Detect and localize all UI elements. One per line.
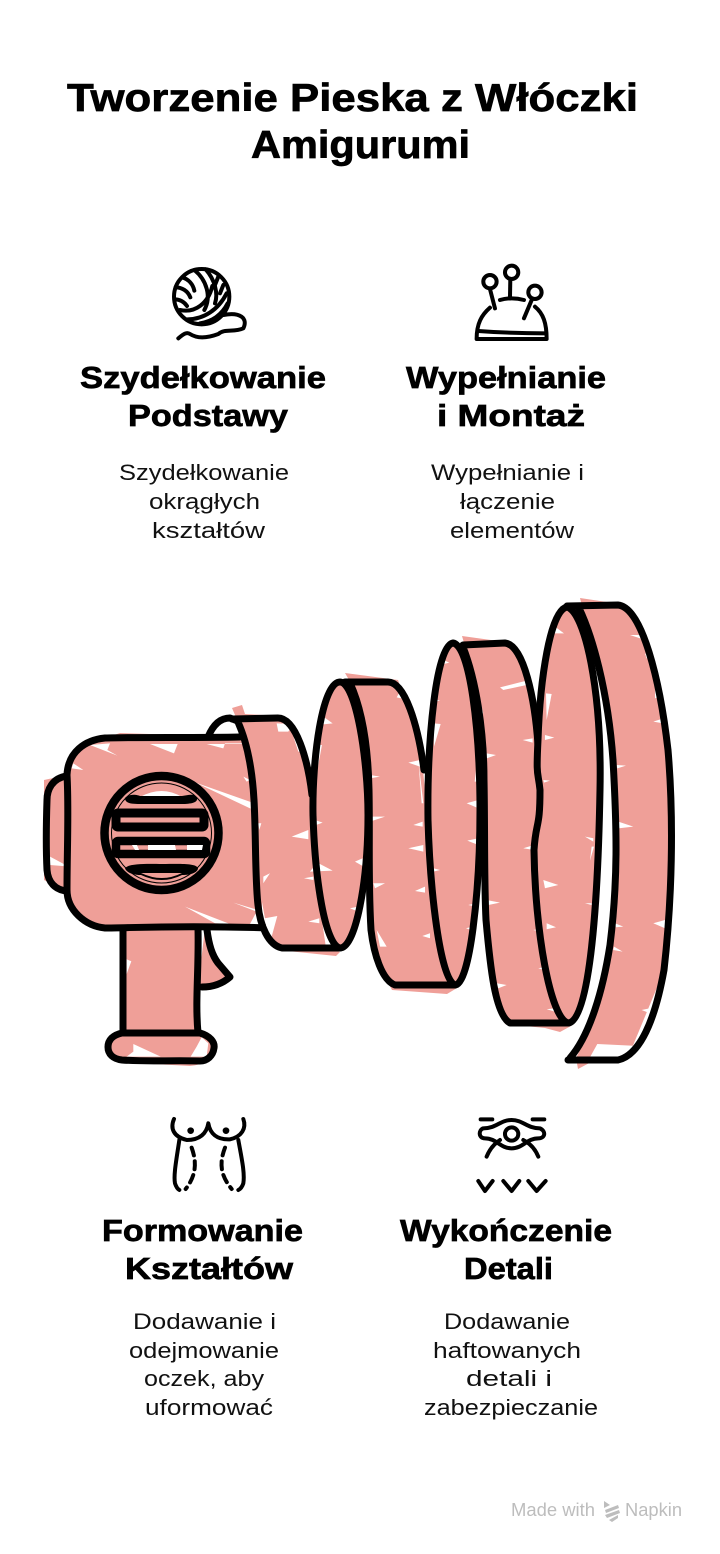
heading: Kształtów xyxy=(125,1251,294,1286)
ribbon ellipse 1 xyxy=(304,682,368,948)
panel: finishing details xyxy=(400,1119,612,1420)
footer: made with napkin: Napkin xyxy=(625,1500,682,1520)
heading: Szydełkowanie xyxy=(80,360,326,395)
title xyxy=(67,77,638,167)
description xyxy=(431,460,584,543)
trigger xyxy=(198,928,230,987)
foot xyxy=(108,1033,214,1066)
heading: Wypełnianie xyxy=(406,360,606,395)
description: zabezpieczanie xyxy=(424,1395,598,1420)
speaker grille xyxy=(104,776,218,890)
icon: embroidered eye xyxy=(478,1119,546,1191)
description: Wypełnianie i xyxy=(431,460,584,485)
ribbon coil 2 xyxy=(345,673,457,994)
heading: Formowanie xyxy=(102,1213,303,1248)
icon: pin cushion xyxy=(477,266,547,339)
icon: shaping forms xyxy=(172,1119,244,1190)
body xyxy=(67,733,270,930)
ribbon ellipse 2 xyxy=(428,643,480,985)
ribbon coil 4 xyxy=(567,598,672,1069)
panel: shaping xyxy=(102,1119,303,1420)
megaphone illustration xyxy=(44,598,672,1069)
description: kształtów xyxy=(152,518,265,543)
title: Amigurumi xyxy=(251,124,470,167)
description xyxy=(119,460,289,543)
description: Dodawanie xyxy=(444,1309,570,1334)
ribbon ellipse 3 xyxy=(534,605,600,1023)
ribbon coil 1 xyxy=(232,705,340,956)
description xyxy=(129,1309,279,1420)
heading xyxy=(102,1213,303,1286)
description: detali i xyxy=(466,1366,552,1391)
footer: made with napkin xyxy=(511,1500,682,1522)
description: elementów xyxy=(450,518,574,543)
panel: crocheting the base xyxy=(80,269,326,543)
ribbon coil 3 xyxy=(462,636,571,1032)
description xyxy=(424,1309,598,1420)
icon: ball of yarn xyxy=(174,269,245,338)
description: łączenie xyxy=(460,489,555,514)
description: uformować xyxy=(145,1395,273,1420)
ribbon start arc xyxy=(208,718,240,737)
description: haftowanych xyxy=(433,1338,581,1363)
heading xyxy=(80,360,326,433)
heading: Podstawy xyxy=(128,398,289,433)
footer: made with napkin: Made with xyxy=(511,1500,595,1520)
description: oczek, aby xyxy=(144,1366,264,1391)
heading xyxy=(400,1213,612,1286)
description: Dodawanie i xyxy=(133,1309,276,1334)
heading: i Montaż xyxy=(437,398,585,433)
heading: Detali xyxy=(464,1251,553,1286)
handle xyxy=(121,925,199,1034)
description: okrągłych xyxy=(149,489,260,514)
heading: Wykończenie xyxy=(400,1213,612,1248)
title: Tworzenie Pieska z Włóczki xyxy=(67,77,638,120)
heading xyxy=(406,360,606,433)
description: odejmowanie xyxy=(129,1338,279,1363)
panel: stuffing and assembly xyxy=(406,266,606,543)
description: Szydełkowanie xyxy=(119,460,289,485)
back cap xyxy=(44,775,97,892)
